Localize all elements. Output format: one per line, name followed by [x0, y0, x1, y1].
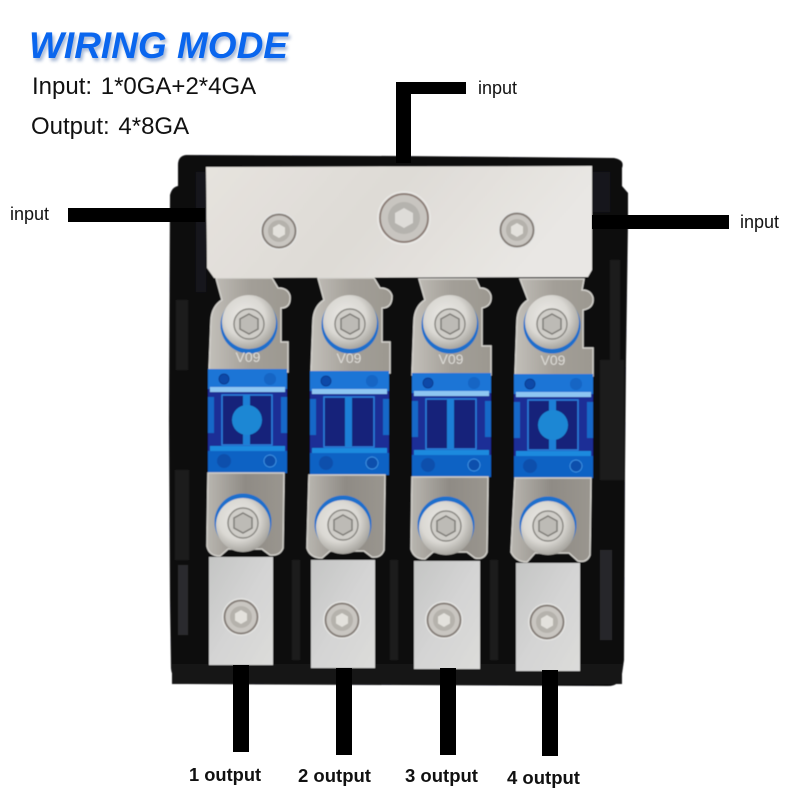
label: 2 output: 2 output [298, 765, 371, 786]
lower tab [411, 477, 488, 559]
lower tab [511, 478, 591, 562]
label: input right: input [740, 212, 779, 232]
output line 3 [440, 668, 456, 755]
input bus bar [206, 166, 592, 278]
fuse block product [169, 155, 628, 686]
input line: left [68, 208, 205, 222]
upper screw [322, 295, 378, 354]
label: input top: input [478, 78, 517, 98]
fuse rating mark: V09 [337, 350, 362, 366]
spec: output gauge: Output: 4*8GA [31, 113, 189, 140]
lower screw [418, 496, 474, 555]
lower tab [207, 473, 284, 556]
blue fuse [208, 369, 287, 473]
fuse rating mark: V09 [236, 349, 261, 365]
housing: side ribs [172, 172, 624, 684]
housing [169, 155, 628, 686]
output line 1 [233, 665, 249, 752]
bus bar screw right [498, 211, 536, 249]
terminal screw [222, 598, 260, 636]
column 3 [411, 279, 491, 669]
blue fuse [412, 373, 491, 477]
spec: input gauge: Input: 1*0GA+2*4GA [32, 73, 256, 100]
input line: right [592, 215, 729, 229]
fuse rating mark: V09 [541, 352, 566, 368]
bus bar screw left [260, 212, 298, 250]
label: 1 output: 1 output [189, 764, 261, 785]
output line 4 [542, 670, 558, 756]
lower screw [520, 496, 576, 555]
top tab [515, 279, 593, 376]
output terminal [209, 557, 273, 665]
top tab [412, 279, 491, 375]
column 1 [207, 278, 290, 665]
blue fuse [514, 374, 593, 478]
output terminal [516, 563, 580, 671]
blue fuse [310, 371, 389, 475]
lower screw [214, 494, 272, 552]
top tab [209, 278, 290, 372]
column 2 [307, 278, 392, 668]
fuse rating mark: V09 [439, 351, 464, 367]
column 4 [511, 279, 593, 671]
label: 4 output: 4 output [507, 767, 580, 788]
output line 2 [336, 668, 352, 755]
upper screw [220, 295, 278, 354]
terminal screw [425, 601, 463, 639]
terminal screw [528, 603, 566, 641]
output terminal [311, 560, 375, 668]
label: 3 output: 3 output [405, 765, 478, 786]
lower tab [307, 475, 385, 558]
bus bar screw center [377, 191, 431, 245]
label: input left: input [10, 204, 49, 224]
upper screw [422, 295, 478, 354]
upper screw [524, 295, 580, 354]
top tab [311, 278, 392, 373]
input line: top [396, 82, 466, 163]
terminal screw [323, 601, 361, 639]
title: WIRING MODE [29, 25, 289, 66]
lower screw [314, 496, 372, 554]
title: WIRING MODE [31, 28, 291, 69]
output terminal [414, 561, 480, 669]
